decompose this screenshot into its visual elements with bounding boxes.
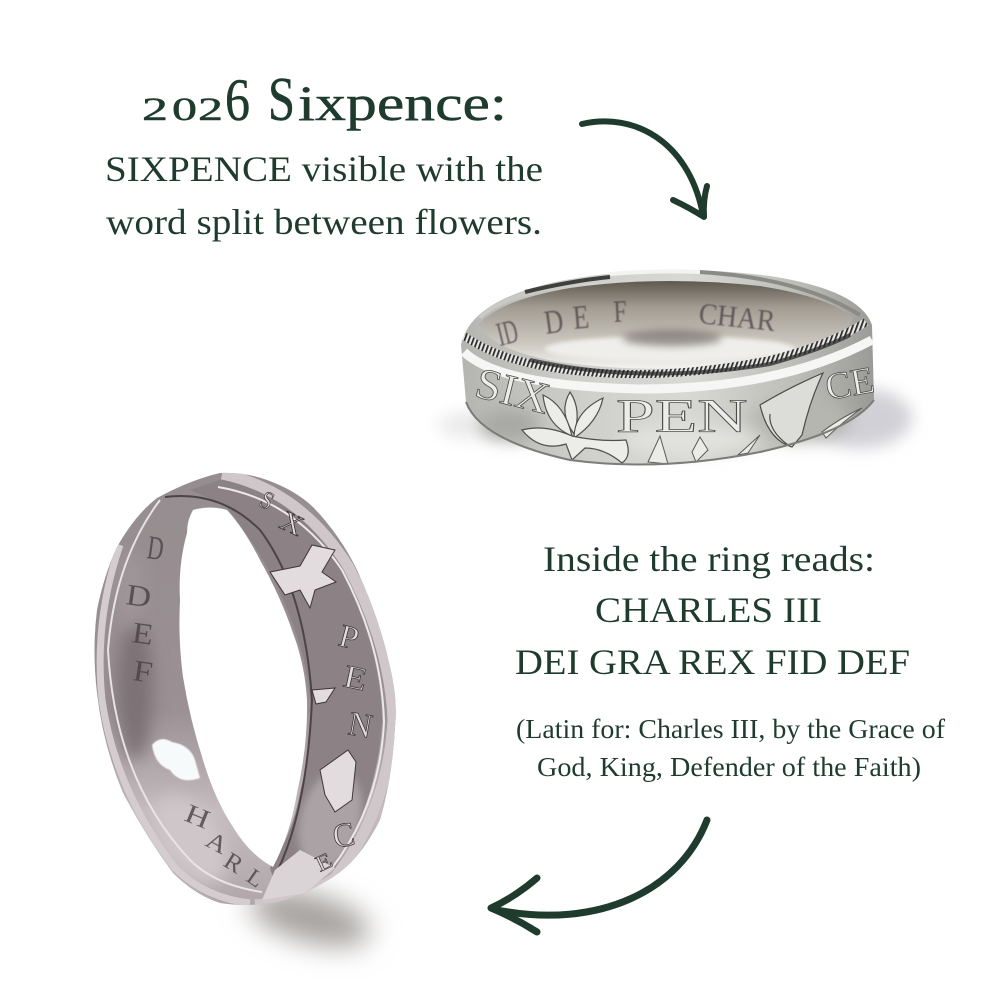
outer wall rim	[100, 545, 250, 903]
band lettering: CE	[822, 359, 877, 409]
band lettering: P	[335, 618, 363, 657]
title: ixpence:	[298, 75, 507, 131]
inner rim highlight	[480, 282, 580, 318]
inner lettering: F	[131, 653, 155, 689]
title: 2	[142, 92, 168, 128]
ring body	[85, 465, 405, 910]
arrow: to lower ring	[491, 820, 707, 932]
ring shadow	[244, 879, 376, 957]
band tone	[296, 776, 364, 868]
inner lettering: ID	[493, 311, 522, 353]
reeded coin edge	[464, 322, 866, 374]
flower left	[522, 392, 628, 463]
ring photo: top ring, sixpence side	[438, 270, 912, 464]
ring photo: lower ring, inside view	[85, 465, 405, 957]
ring shadow	[808, 388, 912, 448]
bottom lip	[262, 850, 335, 900]
inner lettering: L	[242, 864, 268, 893]
inside text block: DEI GRA REX FID DEF	[515, 642, 910, 682]
band lettering: X	[275, 505, 308, 542]
latin translation text: God, King, Defender of the Faith)	[537, 752, 921, 782]
latin translation text	[516, 714, 945, 782]
subtitle text block: word split between flowers.	[106, 202, 542, 242]
band lettering: SIX	[471, 358, 555, 423]
subtitle text block	[105, 149, 543, 242]
inner lettering: F	[613, 294, 628, 330]
subtitle text block: SIXPENCE visible with the	[105, 149, 543, 189]
band tonal blotches	[480, 398, 850, 454]
band lower edge	[466, 400, 874, 464]
band lettering: C	[330, 815, 358, 856]
bright reflection	[152, 739, 200, 780]
inner lettering: E	[571, 297, 591, 337]
inside text block	[515, 539, 910, 682]
arrow: to top ring	[582, 121, 707, 217]
title: S	[268, 66, 295, 134]
latin translation text: (Latin for: Charles III, by the Grace of	[516, 714, 945, 744]
band lettering	[471, 358, 877, 442]
inside text block: CHARLES III	[595, 590, 822, 630]
title: 2	[198, 92, 223, 128]
leaves	[648, 408, 862, 464]
band lettering: N	[346, 705, 375, 746]
inner lettering: D	[124, 577, 153, 614]
face rim highlight	[222, 474, 393, 905]
coin face band	[190, 478, 382, 900]
band lettering	[255, 486, 375, 877]
inner lettering: D	[542, 301, 566, 342]
band lettering: E	[312, 848, 336, 877]
flower and leaves	[270, 545, 356, 812]
band lettering: PEN	[616, 389, 747, 442]
title: 0	[172, 92, 197, 128]
inner lettering: R	[219, 847, 248, 879]
polished rim	[464, 340, 872, 389]
inner lettering: CHAR	[697, 297, 778, 338]
inner lettering: D	[145, 530, 166, 568]
ring interior	[479, 281, 853, 369]
inner lettering: E	[130, 615, 156, 651]
inner wall tone	[112, 626, 230, 888]
inner lettering: A	[201, 825, 233, 860]
inner lettering	[493, 294, 778, 353]
inner lettering	[124, 530, 268, 893]
ring band outer	[461, 270, 874, 464]
inside text block: Inside the ring reads:	[543, 539, 875, 579]
band lettering: E	[340, 658, 370, 698]
title	[142, 66, 507, 134]
band lettering: S	[255, 486, 279, 516]
inner lettering: H	[181, 798, 214, 835]
flower right	[760, 373, 823, 447]
title: 6	[225, 67, 250, 133]
